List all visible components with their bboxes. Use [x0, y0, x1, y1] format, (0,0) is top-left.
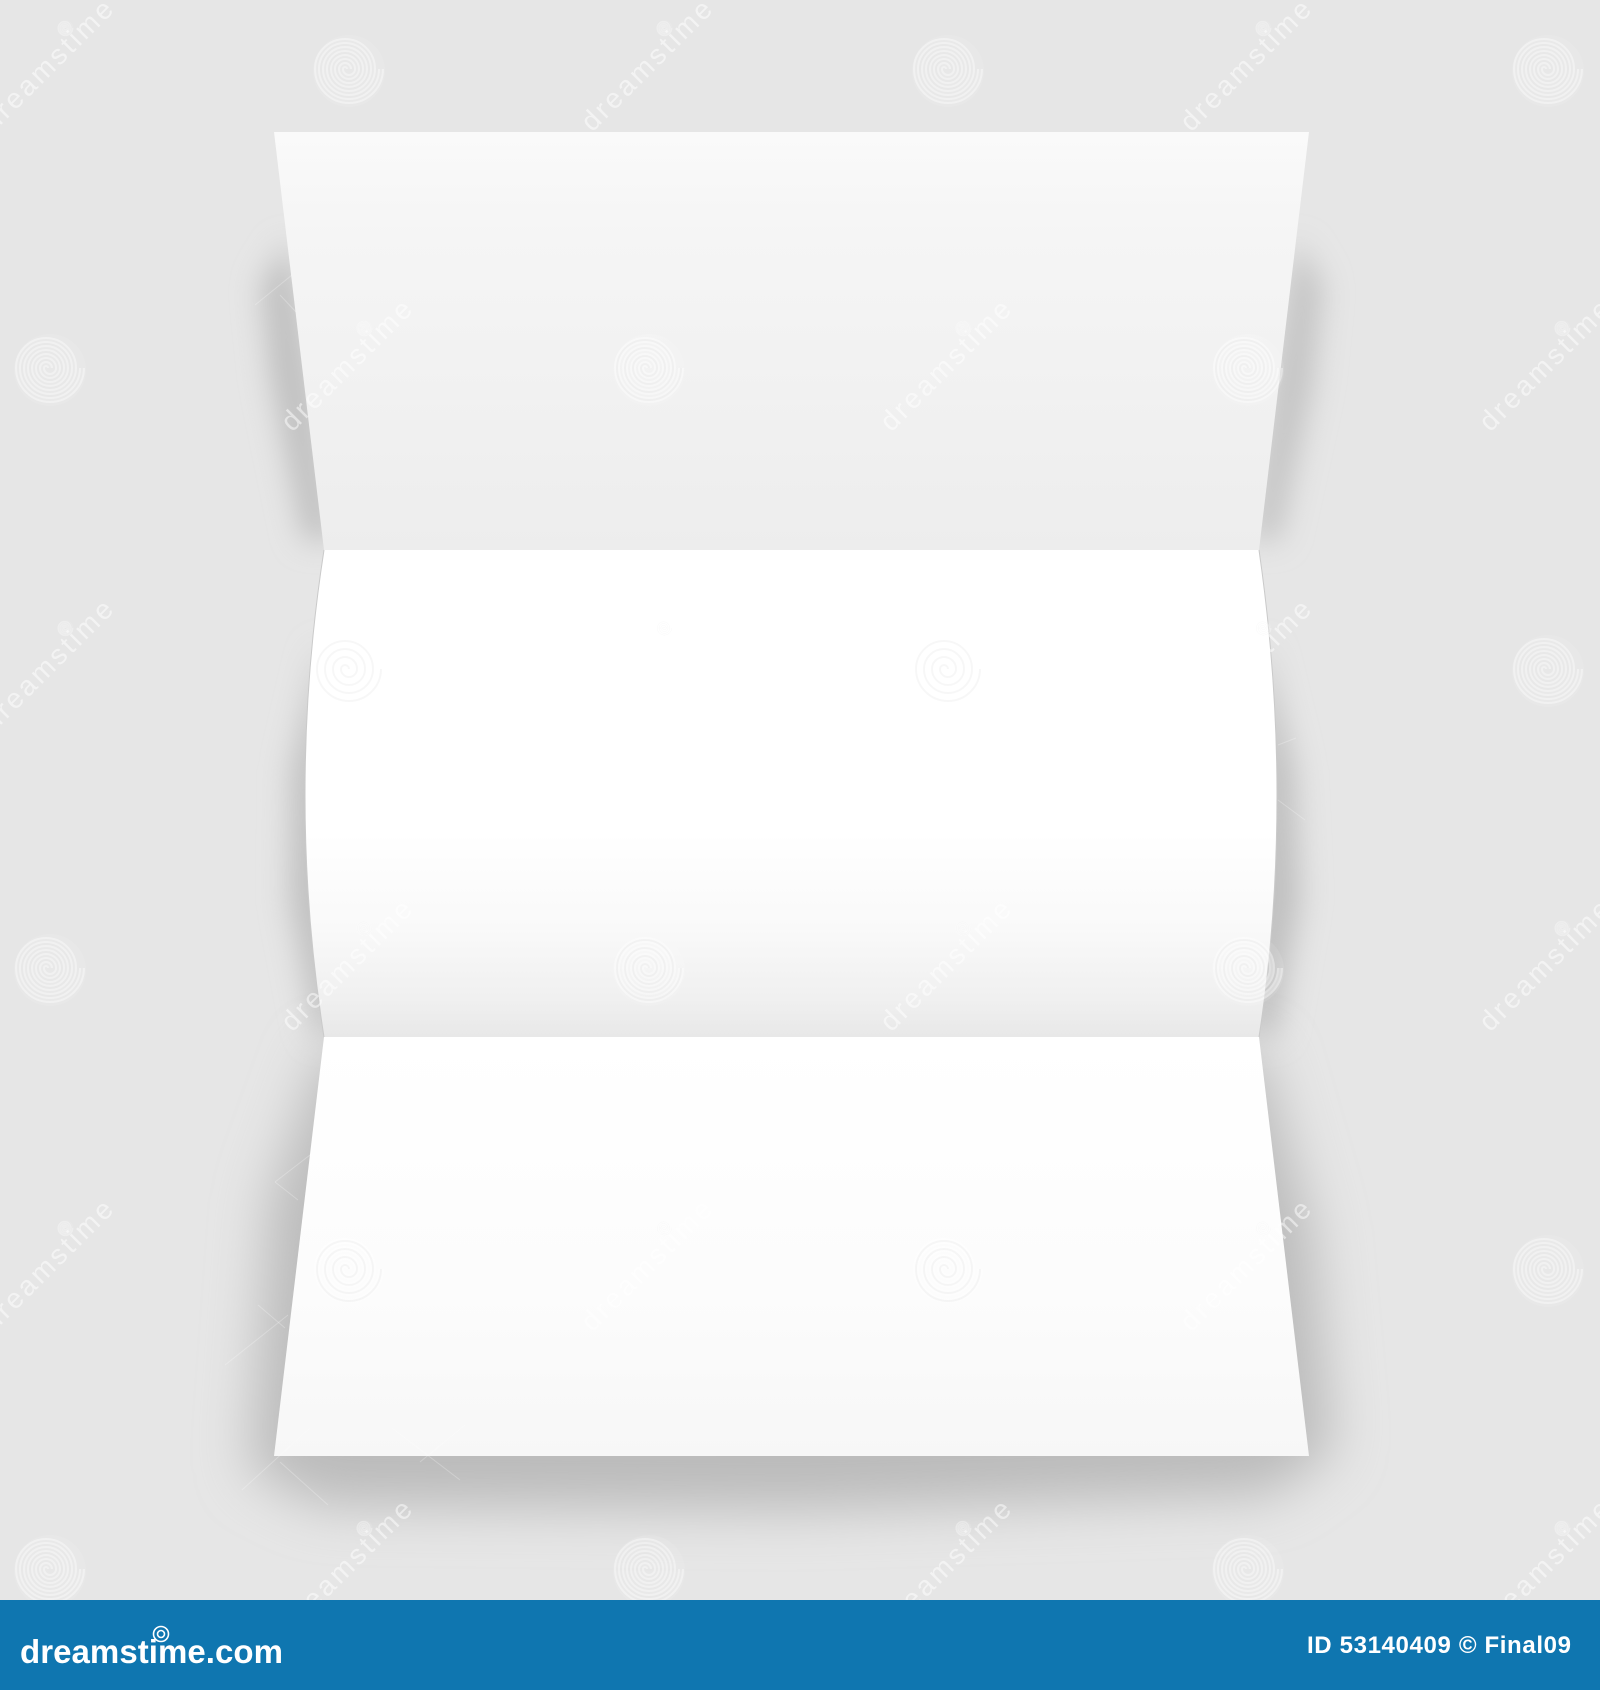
watermark text: dreamstime [575, 1194, 718, 1337]
fold panel: top [274, 132, 1309, 550]
watermark text: dreamstime [1174, 1194, 1317, 1337]
watermark text: dreamstime [1174, 594, 1317, 737]
watermark text: dreamstime [575, 594, 718, 737]
fold panel: bottom [274, 1037, 1309, 1456]
watermark text: dreamstime [275, 894, 418, 1037]
logo text: dreamstime.com [20, 1633, 283, 1670]
watermark text: dreamstime [275, 294, 418, 437]
fold panel: middle [305, 550, 1277, 1037]
paper shadows [250, 240, 1332, 1510]
faint watermark lines [225, 275, 1305, 1505]
icon: logo spiral [154, 1626, 168, 1642]
watermark text: dreamstime [874, 894, 1017, 1037]
watermark text: dreamstime [874, 294, 1017, 437]
footer band [0, 1600, 1600, 1690]
watermark text: dreamstime [874, 1494, 1017, 1637]
image id and credit: ID 53140409 © Final09 [1307, 1632, 1571, 1659]
watermark text: dreamstime [275, 1494, 418, 1637]
